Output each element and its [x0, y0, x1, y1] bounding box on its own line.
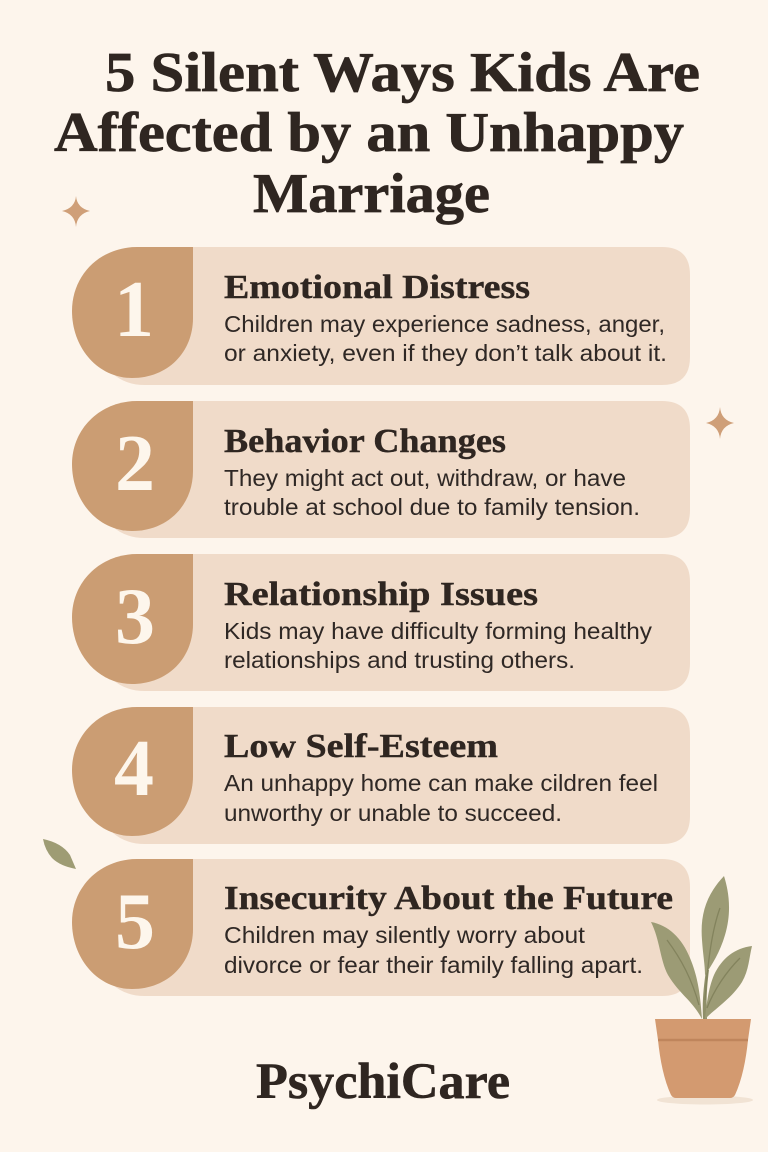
title: 5 Silent Ways Kids Are	[105, 42, 700, 104]
text 3: relationships and trusting others.	[224, 647, 575, 673]
heading 3: Relationship Issues	[224, 576, 538, 613]
number 4: 4	[114, 725, 154, 813]
text 2: They might act out, withdraw, or have	[224, 465, 626, 491]
heading 5: Insecurity About the Future	[224, 880, 673, 917]
card 1	[72, 247, 690, 385]
text 5: Children may silently worry about	[224, 922, 586, 948]
text 1	[224, 311, 667, 366]
text 4	[224, 770, 658, 826]
brand name: PsychiCare	[256, 1054, 510, 1110]
card 5	[72, 859, 690, 996]
text 5: divorce or fear their family falling apart.	[224, 952, 643, 978]
icon: sparkle right	[706, 407, 734, 439]
text 1: or anxiety, even if they don’t talk about it.	[224, 340, 667, 366]
badge 4	[72, 707, 193, 836]
badge 3	[72, 554, 193, 684]
icon: potted plant	[651, 876, 753, 1104]
heading 2: Behavior Changes	[224, 423, 506, 460]
number 1: 1	[114, 266, 154, 354]
text 2: trouble at school due to family tension.	[224, 494, 640, 520]
text 3	[224, 618, 653, 673]
text 4: An unhappy home can make cildren feel	[224, 770, 658, 796]
text 3: Kids may have difficulty forming healthy	[224, 618, 653, 644]
icon: sparkle left	[62, 196, 90, 227]
badge 5	[72, 859, 193, 989]
text 2	[224, 465, 640, 520]
card 2	[72, 401, 690, 538]
icon: falling leaf	[43, 839, 76, 869]
heading 4: Low Self-Esteem	[224, 728, 498, 765]
card 3	[72, 554, 690, 691]
badge 1	[72, 247, 193, 378]
text 1: Children may experience sadness, anger,	[224, 311, 665, 337]
card 4	[72, 707, 690, 844]
title: Marriage	[253, 163, 490, 225]
text 4: unworthy or unable to succeed.	[224, 800, 562, 826]
number 2: 2	[115, 420, 155, 508]
title: Affected by an Unhappy	[54, 102, 684, 164]
number 3: 3	[115, 573, 155, 661]
heading 1: Emotional Distress	[224, 269, 530, 306]
number 5: 5	[115, 878, 155, 966]
badge 2	[72, 401, 193, 531]
text 5	[224, 922, 643, 978]
title	[54, 42, 700, 225]
